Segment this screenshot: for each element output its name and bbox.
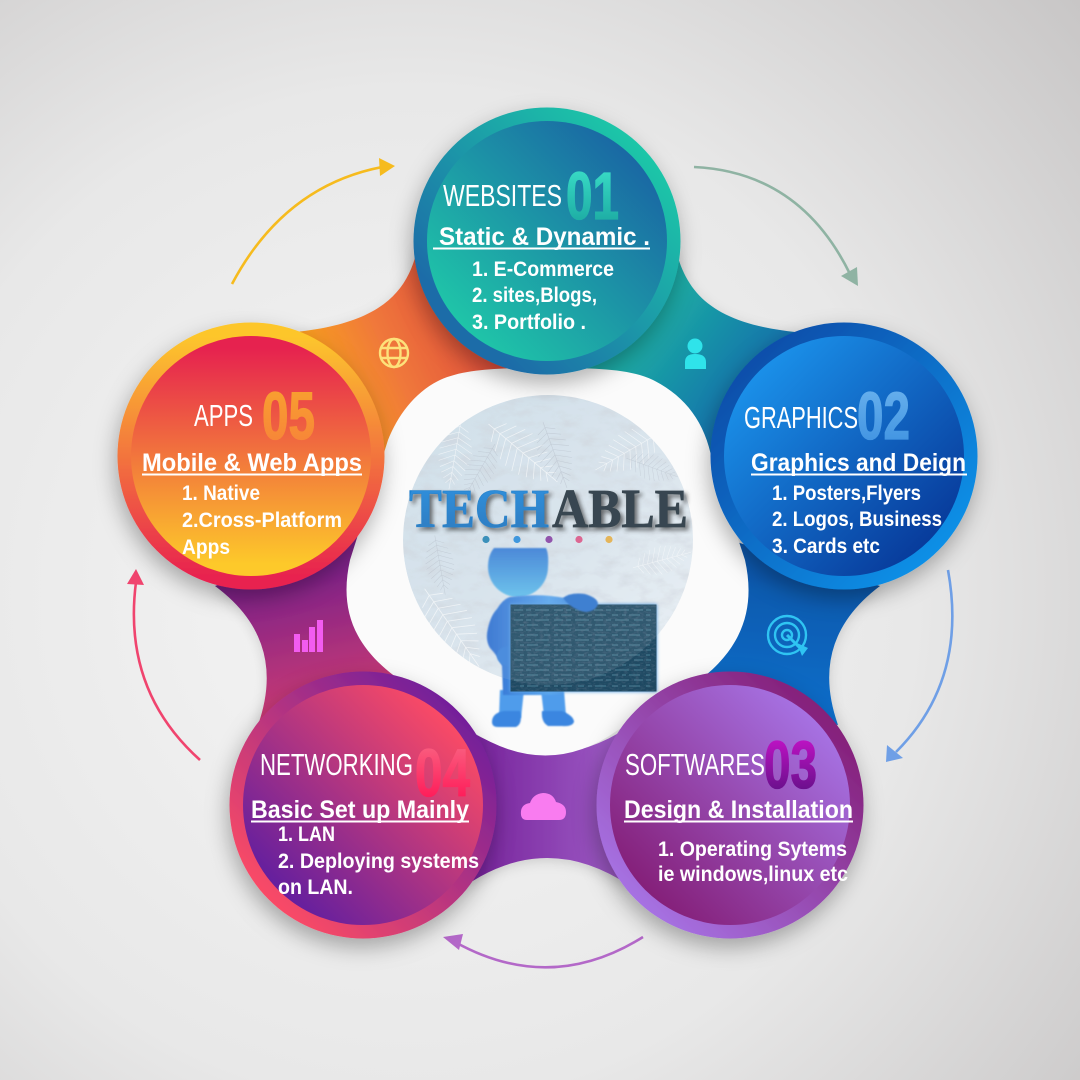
underline: [624, 820, 853, 822]
figure: screen: [510, 604, 657, 692]
icon: globe: [380, 339, 408, 367]
label: softwares: SOFTWARES: [625, 747, 765, 782]
arrow: apps to websites: [232, 158, 395, 284]
panel: 02 graphics: [710, 322, 978, 590]
underline: [142, 474, 362, 476]
frost veil over figure: [403, 395, 693, 685]
number: 01: 01: [566, 159, 619, 234]
circle: 03 outer ring: [596, 672, 864, 938]
panel: 01 websites: [414, 108, 680, 374]
figure: torso and arms: [487, 595, 590, 695]
number: 04: 04: [415, 736, 470, 811]
icon: cloud: [521, 793, 566, 820]
word: ABLE: ABLE: [552, 478, 688, 539]
list: graphics: 2. Logos, Business: [772, 508, 942, 531]
arrow: graphics to softwares: [886, 570, 952, 762]
figure holding screen: [403, 395, 693, 727]
figure: right hand: [563, 594, 598, 612]
circle: 05 inner disc: [131, 336, 371, 576]
heading: static and dynamic: Static & Dynamic .: [439, 223, 650, 251]
number: 02: 02: [857, 379, 910, 454]
circle: 04 outer ring: [230, 672, 496, 938]
circle: 04 inner disc: [243, 685, 483, 925]
panel: 04 networking: [230, 672, 496, 938]
list: networking: 2. Deploying systems: [278, 850, 479, 873]
circle: 01 outer ring: [414, 108, 680, 374]
number: 05: 05: [262, 379, 315, 454]
arrow: websites to graphics: [694, 167, 858, 286]
connector: websites to graphics: [547, 250, 805, 480]
list: softwares: ie windows,linux etc: [658, 863, 848, 886]
logo dots: [482, 536, 613, 543]
list: apps: 1. Native: [182, 482, 260, 505]
connector: softwares to networking: [465, 726, 630, 886]
label: graphics: GRAPHICS: [744, 400, 858, 435]
connector: graphics to softwares: [690, 540, 880, 725]
list: apps: 2.Cross-Platform: [182, 509, 342, 532]
list: networking: [278, 823, 479, 899]
panel: 05 apps: [118, 322, 384, 590]
circle: 05 outer ring: [118, 322, 384, 590]
icon: bar chart: [294, 620, 323, 652]
label: networking: NETWORKING: [260, 747, 413, 782]
connector: networking to apps: [215, 530, 400, 725]
list: websites: 1. E-Commerce: [472, 258, 614, 281]
list: softwares: 1. Operating Sytems: [658, 838, 847, 861]
logo disc: frost circle: [403, 395, 695, 685]
underline: [251, 820, 469, 822]
list: networking: 1. LAN: [278, 823, 335, 846]
heading: basic set up: Basic Set up Mainly: [251, 796, 469, 824]
label: apps: APPS: [194, 398, 253, 433]
list: apps: [182, 482, 342, 559]
figure: left hand: [497, 646, 521, 666]
figure: feet: [492, 711, 574, 727]
list: websites: [472, 258, 614, 334]
figure: legs: [499, 690, 566, 718]
word: TECH: TECH: [409, 478, 549, 539]
icon: target: [768, 616, 808, 656]
label: websites: WEBSITES: [443, 178, 562, 213]
list: softwares: [658, 838, 848, 886]
icon: person: [685, 338, 706, 369]
list: websites: 2. sites,Blogs,: [472, 284, 597, 307]
arrow: softwares to networking: [443, 934, 643, 967]
list: graphics: 1. Posters,Flyers: [772, 482, 921, 505]
list: apps: Apps: [182, 536, 230, 559]
underline: [751, 474, 967, 476]
circle: 02 inner disc: [724, 336, 964, 576]
list: graphics: 3. Cards etc: [772, 535, 880, 558]
list: networking: on LAN.: [278, 876, 353, 899]
logo wordmark: [409, 478, 688, 539]
figure: head: [488, 548, 548, 597]
panel: 03 softwares: [596, 672, 864, 938]
circle: 01 inner disc: [427, 121, 667, 361]
heading: graphics and design: Graphics and Deign: [751, 449, 966, 477]
list: graphics: [772, 482, 942, 558]
connector: apps to websites: [285, 245, 547, 470]
heading: mobile and web apps: Mobile & Web Apps: [142, 449, 362, 477]
list: websites: 3. Portfolio .: [472, 311, 586, 334]
heading: design and installation: Design & Installation: [624, 796, 853, 824]
number: 03: 03: [764, 728, 817, 803]
arrow: networking to apps: [127, 569, 200, 760]
circle: 02 outer ring: [710, 322, 978, 590]
circle: 03 inner disc: [610, 685, 850, 925]
centre white shape: [347, 368, 749, 756]
underline: [433, 248, 650, 250]
